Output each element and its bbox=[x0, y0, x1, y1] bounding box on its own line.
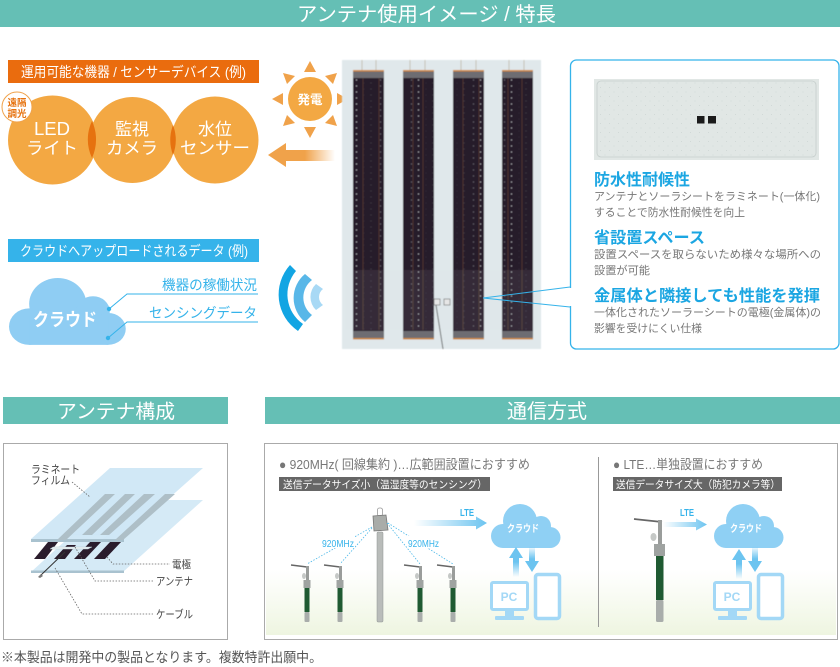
label: electrode: 電極 bbox=[172, 558, 191, 571]
label: laminate film: ラミネート bbox=[31, 463, 80, 476]
heading: cloud data bbox=[8, 239, 259, 262]
layer: antenna bbox=[50, 535, 108, 549]
device circles: 監視 bbox=[115, 120, 149, 139]
device circles: LED bbox=[34, 119, 70, 139]
icon: sun power generation: 発電 bbox=[297, 93, 323, 107]
label: antenna: アンテナ bbox=[156, 575, 193, 588]
tag: small data size: 送信データサイズ小（温湿度等のセンシング） bbox=[283, 478, 487, 491]
layer: solar cells bbox=[34, 541, 122, 559]
feature: metal adjacency: 一体化されたソーラーシートの電極(金属体)の bbox=[594, 305, 821, 319]
cable bbox=[38, 552, 65, 578]
icon: wireless waves bbox=[279, 265, 323, 331]
heading: communication method: 通信方式 bbox=[507, 400, 587, 423]
label: laminate film: フィルム bbox=[31, 474, 70, 487]
arrows: pc and phone exchange bbox=[732, 546, 762, 579]
panel: communication methods bbox=[264, 444, 838, 640]
feature: waterproof bbox=[594, 170, 820, 219]
label: 920MHz left: 920MHz bbox=[322, 538, 354, 550]
callout: sensing data: センシングデータ bbox=[149, 305, 257, 321]
feature: space saving: 設置が可能 bbox=[594, 263, 650, 277]
feature: metal adjacency: 影響を受けにくい仕様 bbox=[594, 321, 702, 335]
arrow: LTE uplink: LTE bbox=[460, 508, 474, 519]
feature: metal adjacency bbox=[594, 286, 821, 335]
badge: remote dimming: 調光 bbox=[7, 108, 27, 120]
icon: cloud bbox=[714, 504, 784, 548]
device circles: ライト bbox=[26, 139, 78, 158]
callout: sensing data bbox=[106, 305, 258, 340]
badge: remote dimming bbox=[2, 92, 32, 122]
panel: features bbox=[570, 60, 839, 349]
icon: gateway pole bbox=[373, 508, 388, 622]
icon: cloud bbox=[491, 504, 560, 548]
footnote: ※本製品は開発中の製品となります。複数特許出願中。 bbox=[1, 649, 322, 665]
icon: PC and smartphone: PC bbox=[501, 590, 518, 604]
feature: waterproof: することで防水性耐候性を向上 bbox=[594, 205, 745, 219]
layer: lower film bbox=[31, 500, 203, 573]
arrow: LTE uplink: LTE bbox=[680, 508, 694, 519]
callout: operating status bbox=[107, 277, 258, 311]
callout lines to features panel bbox=[483, 287, 570, 307]
label: laminate film bbox=[31, 463, 80, 487]
device circles: 水位 bbox=[198, 120, 232, 139]
photo: solar antenna panel bbox=[342, 60, 541, 349]
sensor poles bbox=[291, 565, 456, 622]
panel: antenna structure diagram bbox=[4, 444, 228, 640]
heading: LTE: ● LTE…単独設置におすすめ bbox=[613, 457, 763, 472]
feature: space saving: 設置スペースを取らないため様々な場所への bbox=[594, 247, 821, 261]
icon: cloud: クラウド bbox=[730, 523, 762, 535]
device circles bbox=[8, 96, 258, 184]
layer: upper film bbox=[31, 468, 203, 542]
icon: cloud: クラウド bbox=[33, 310, 97, 330]
heading: usable devices: 運用可能な機器 / センサーデバイス (例) bbox=[21, 64, 246, 80]
icon: cloud bbox=[9, 278, 126, 345]
feature: waterproof: アンテナとソーラシートをラミネート(一体化) bbox=[594, 189, 820, 203]
arrow: LTE uplink bbox=[663, 508, 707, 530]
photo: antenna sheet bbox=[594, 79, 819, 160]
icon: PC and smartphone bbox=[714, 574, 782, 620]
title banner bbox=[0, 0, 840, 27]
feature: metal adjacency: 金属体と隣接しても性能を発揮 bbox=[594, 286, 820, 305]
section: 920MHz bbox=[279, 457, 560, 622]
arrow: power flow bbox=[268, 143, 335, 167]
heading: 920MHz: ● 920MHz( 回線集約 )…広範囲設置におすすめ bbox=[279, 457, 530, 472]
heading: usable devices bbox=[8, 60, 259, 83]
icon: PC and smartphone: PC bbox=[724, 590, 741, 604]
icon: sun power generation bbox=[272, 61, 348, 138]
panel: cloud data bbox=[8, 239, 259, 345]
icon: cloud: クラウド bbox=[507, 523, 539, 535]
section: LTE bbox=[613, 457, 784, 622]
feature: space saving bbox=[594, 229, 821, 277]
arrows: pc and phone exchange bbox=[509, 546, 539, 577]
feature: space saving: 省設置スペース bbox=[594, 229, 705, 247]
icon: standalone pole bbox=[634, 519, 665, 622]
wireless links bbox=[307, 523, 453, 564]
leader lines bbox=[55, 482, 170, 614]
label: cable: ケーブル bbox=[156, 607, 193, 621]
title banner: アンテナ使用イメージ / 特長 bbox=[297, 3, 556, 26]
device circles: カメラ bbox=[106, 139, 158, 158]
icon: PC and smartphone bbox=[492, 574, 560, 620]
divider bbox=[598, 457, 599, 627]
heading: antenna structure: アンテナ構成 bbox=[57, 401, 175, 423]
heading: communication method bbox=[265, 397, 840, 424]
arrow: LTE uplink bbox=[414, 508, 487, 530]
tag: large data size: 送信データサイズ大（防犯カメラ等） bbox=[616, 478, 780, 491]
panel: usable devices bbox=[2, 60, 259, 184]
feature: waterproof: 防水性耐候性 bbox=[594, 170, 690, 189]
heading: cloud data: クラウドへアップロードされるデータ (例) bbox=[20, 243, 248, 259]
label: 920MHz right: 920MHz bbox=[408, 538, 439, 550]
device circles: センサー bbox=[180, 139, 250, 158]
callout: operating status: 機器の稼働状況 bbox=[162, 277, 257, 293]
badge: remote dimming: 遠隔 bbox=[7, 97, 27, 109]
heading: antenna structure bbox=[3, 397, 228, 424]
